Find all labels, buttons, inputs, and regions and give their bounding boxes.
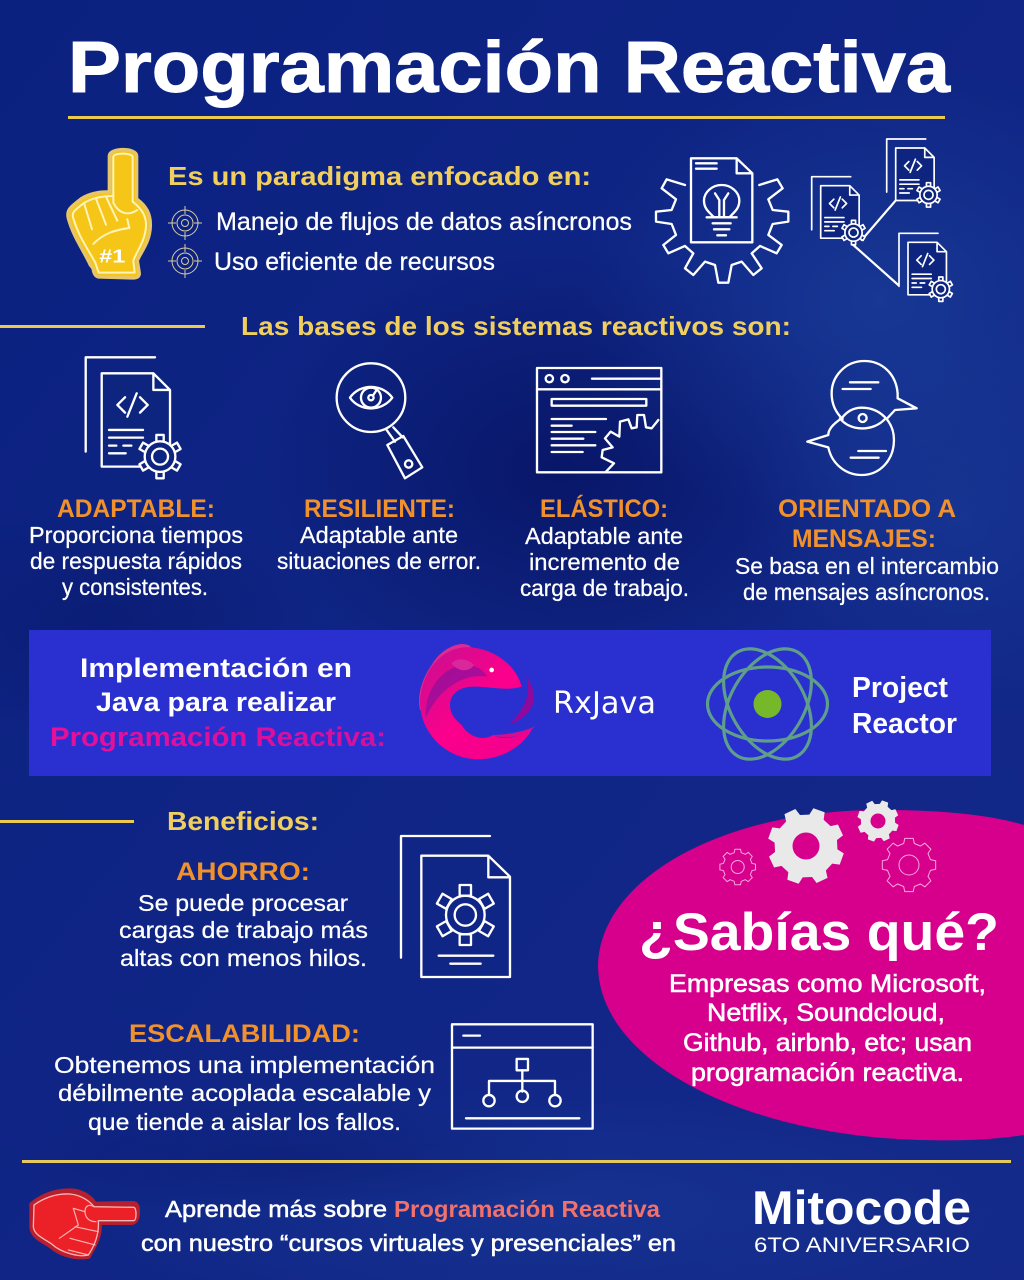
footer call to action: Programación Reactiva (394, 1196, 661, 1222)
column: elastico: carga de trabajo. (520, 575, 689, 601)
column: elastico (520, 494, 689, 601)
footer call to action: con nuestro “cursos virtuales y presenciales” en (141, 1230, 676, 1256)
icon: pointing hand (29, 1188, 140, 1259)
section heading: bases: Las bases de los sistemas reactivos son: (241, 311, 791, 341)
section heading: beneficios: Beneficios: (167, 806, 319, 836)
brand: Mitocode (752, 1181, 971, 1257)
icon: target bullet 1 (168, 206, 202, 240)
column: adaptable (29, 495, 243, 600)
panel: java implementations (29, 630, 991, 776)
callout text: programación reactiva. (691, 1059, 964, 1087)
column: orientado a mensajes (735, 495, 999, 605)
label: Project Reactor: Project (852, 672, 948, 704)
brand: Mitocode: 6TO ANIVERSARIO (754, 1234, 970, 1257)
section heading: beneficios (0, 806, 319, 836)
benefit: ahorro (119, 858, 368, 971)
gears decoration (720, 794, 936, 895)
benefit: escalabilidad: Obtenemos una implementación (54, 1052, 435, 1078)
label: Project Reactor: Reactor (852, 708, 957, 740)
benefit: ahorro: AHORRO: (176, 858, 310, 886)
callout text: Empresas como Microsoft, (669, 970, 986, 998)
column: adaptable: Proporciona tiempos (29, 522, 243, 548)
icon: foam finger #1: #1 (99, 246, 125, 267)
icon: adaptable code document (86, 357, 181, 478)
banner text: Implementación en (80, 653, 352, 683)
column: adaptable: de respuesta rápidos (30, 548, 242, 574)
label: Project Reactor (852, 672, 957, 740)
icon: document with gear (401, 836, 510, 977)
column: elastico: incremento de (529, 549, 680, 575)
column: resiliente: RESILIENTE: (304, 495, 455, 523)
logo: RxJava (419, 644, 535, 759)
footer call to action: Aprende más sobre (165, 1196, 387, 1222)
section heading: bases (0, 311, 791, 341)
column: resiliente: Adaptable ante (300, 522, 458, 548)
banner text: Programación Reactiva: (50, 722, 386, 752)
icon: magnifier with eye (337, 363, 422, 478)
callout heading: ¿Sabías qué? (639, 903, 999, 962)
callout text (669, 970, 986, 1087)
callout text: Netflix, Soundcloud, (707, 999, 945, 1027)
icon: speech bubbles (807, 361, 917, 475)
panel: sabias que (598, 794, 1024, 1140)
column: orientado a mensajes: de mensajes asíncronos. (743, 579, 990, 605)
logo: Project Reactor atom (705, 634, 830, 774)
footer divider (22, 1160, 1011, 1163)
icon: gear document with light bulb (656, 158, 788, 283)
footer call to action (141, 1196, 676, 1256)
icon: foam finger #1 (68, 149, 150, 278)
callout text: Github, airbnb, etc; usan (683, 1029, 972, 1057)
title: Programación Reactiva (68, 28, 951, 108)
benefit: escalabilidad: ESCALABILIDAD: (129, 1020, 360, 1048)
benefit: ahorro: cargas de trabajo más (119, 917, 368, 943)
benefit: escalabilidad: que tiende a aislar los fallos. (88, 1109, 401, 1135)
intro text (168, 161, 632, 276)
icon: browser window with gear (537, 368, 661, 472)
banner text: Java para realizar (96, 687, 337, 717)
column: resiliente (277, 495, 481, 574)
column: orientado a mensajes: Se basa en el intercambio (735, 553, 999, 579)
column: resiliente: situaciones de error. (277, 548, 481, 574)
icon: target bullet 2 (168, 244, 202, 278)
column: orientado a mensajes: MENSAJES: (792, 525, 936, 553)
benefit: ahorro: Se puede procesar (138, 890, 348, 916)
bullet: uso eficiente: Uso eficiente de recursos (214, 248, 495, 276)
benefit: ahorro: altas con menos hilos. (120, 945, 367, 971)
column: orientado a mensajes: ORIENTADO A (778, 495, 956, 523)
brand: Mitocode: Mitocode (752, 1181, 971, 1234)
column: elastico: ELÁSTICO: (540, 494, 668, 523)
column: adaptable: y consistentes. (62, 574, 208, 600)
icon: window with hierarchy (452, 1024, 593, 1129)
column: adaptable: ADAPTABLE: (57, 495, 215, 523)
banner text (50, 653, 386, 752)
column: elastico: Adaptable ante (525, 523, 683, 549)
intro heading: Es un paradigma enfocado en: (168, 161, 591, 191)
label: RxJava: RxJava (553, 686, 656, 721)
bullet: manejo de flujos: Manejo de flujos de datos asíncronos (216, 208, 632, 236)
benefit: escalabilidad: débilmente acoplada escalable y (58, 1080, 431, 1106)
benefit: escalabilidad (54, 1020, 435, 1135)
icon: network of code documents (812, 139, 952, 301)
